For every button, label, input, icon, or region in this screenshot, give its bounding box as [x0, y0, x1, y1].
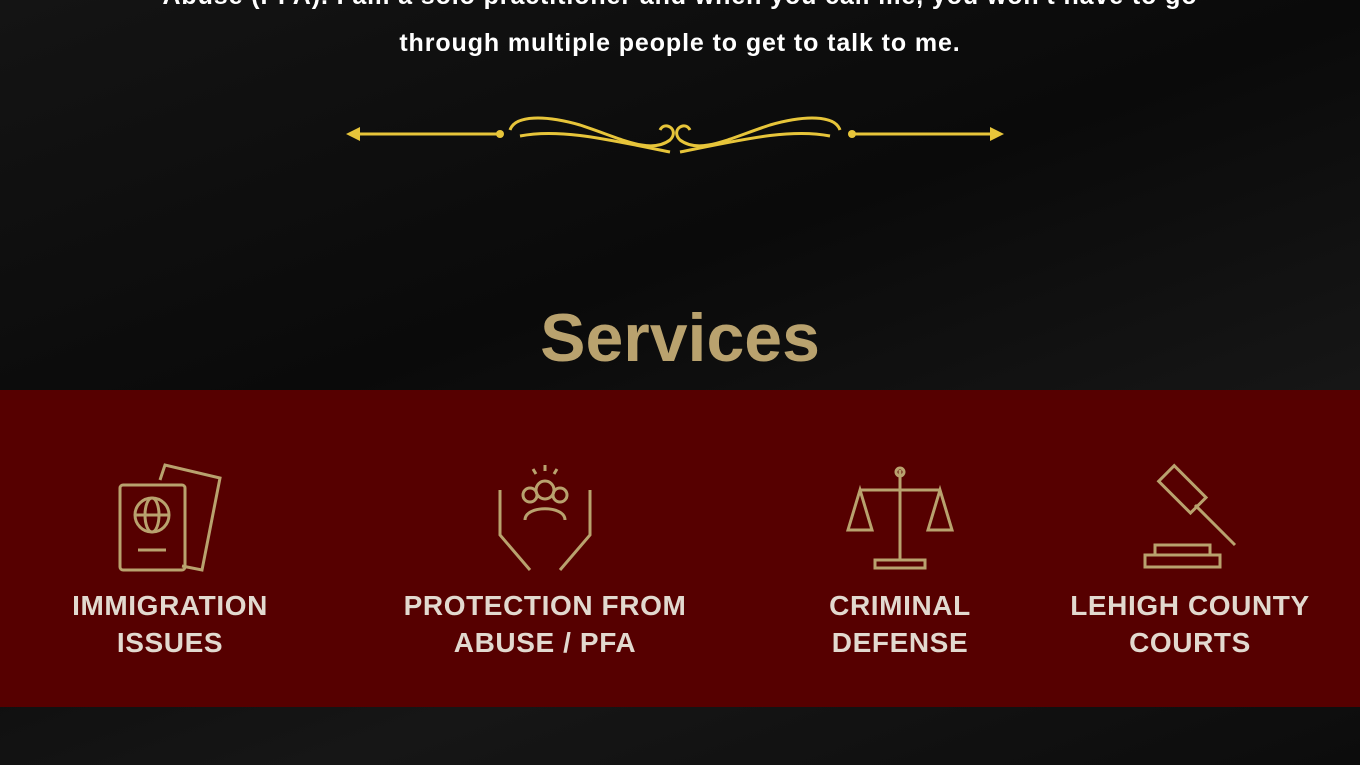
- service: lehigh county courts: [1070, 464, 1310, 658]
- panel: services band: [0, 390, 1360, 707]
- service: immigration: IMMIGRATION: [72, 590, 268, 621]
- heading: Services: Services: [540, 300, 820, 376]
- service: criminal defense: [829, 466, 971, 658]
- service: protection from abuse: [404, 465, 686, 658]
- service: immigration: ISSUES: [117, 627, 223, 658]
- service: criminal defense: CRIMINAL: [829, 590, 971, 621]
- service: protection from abuse: PROTECTION FROM: [404, 590, 686, 621]
- ornament divider: [346, 116, 1004, 154]
- service: protection from abuse: ABUSE / PFA: [454, 627, 636, 658]
- service: lehigh county courts: COURTS: [1129, 627, 1251, 658]
- service: criminal defense: DEFENSE: [832, 627, 968, 658]
- service: lehigh county courts: LEHIGH COUNTY: [1070, 590, 1310, 621]
- intro text: through multiple people to get to talk to me.: [399, 29, 961, 57]
- intro text: [162, 0, 1198, 57]
- service: immigration: [72, 463, 268, 658]
